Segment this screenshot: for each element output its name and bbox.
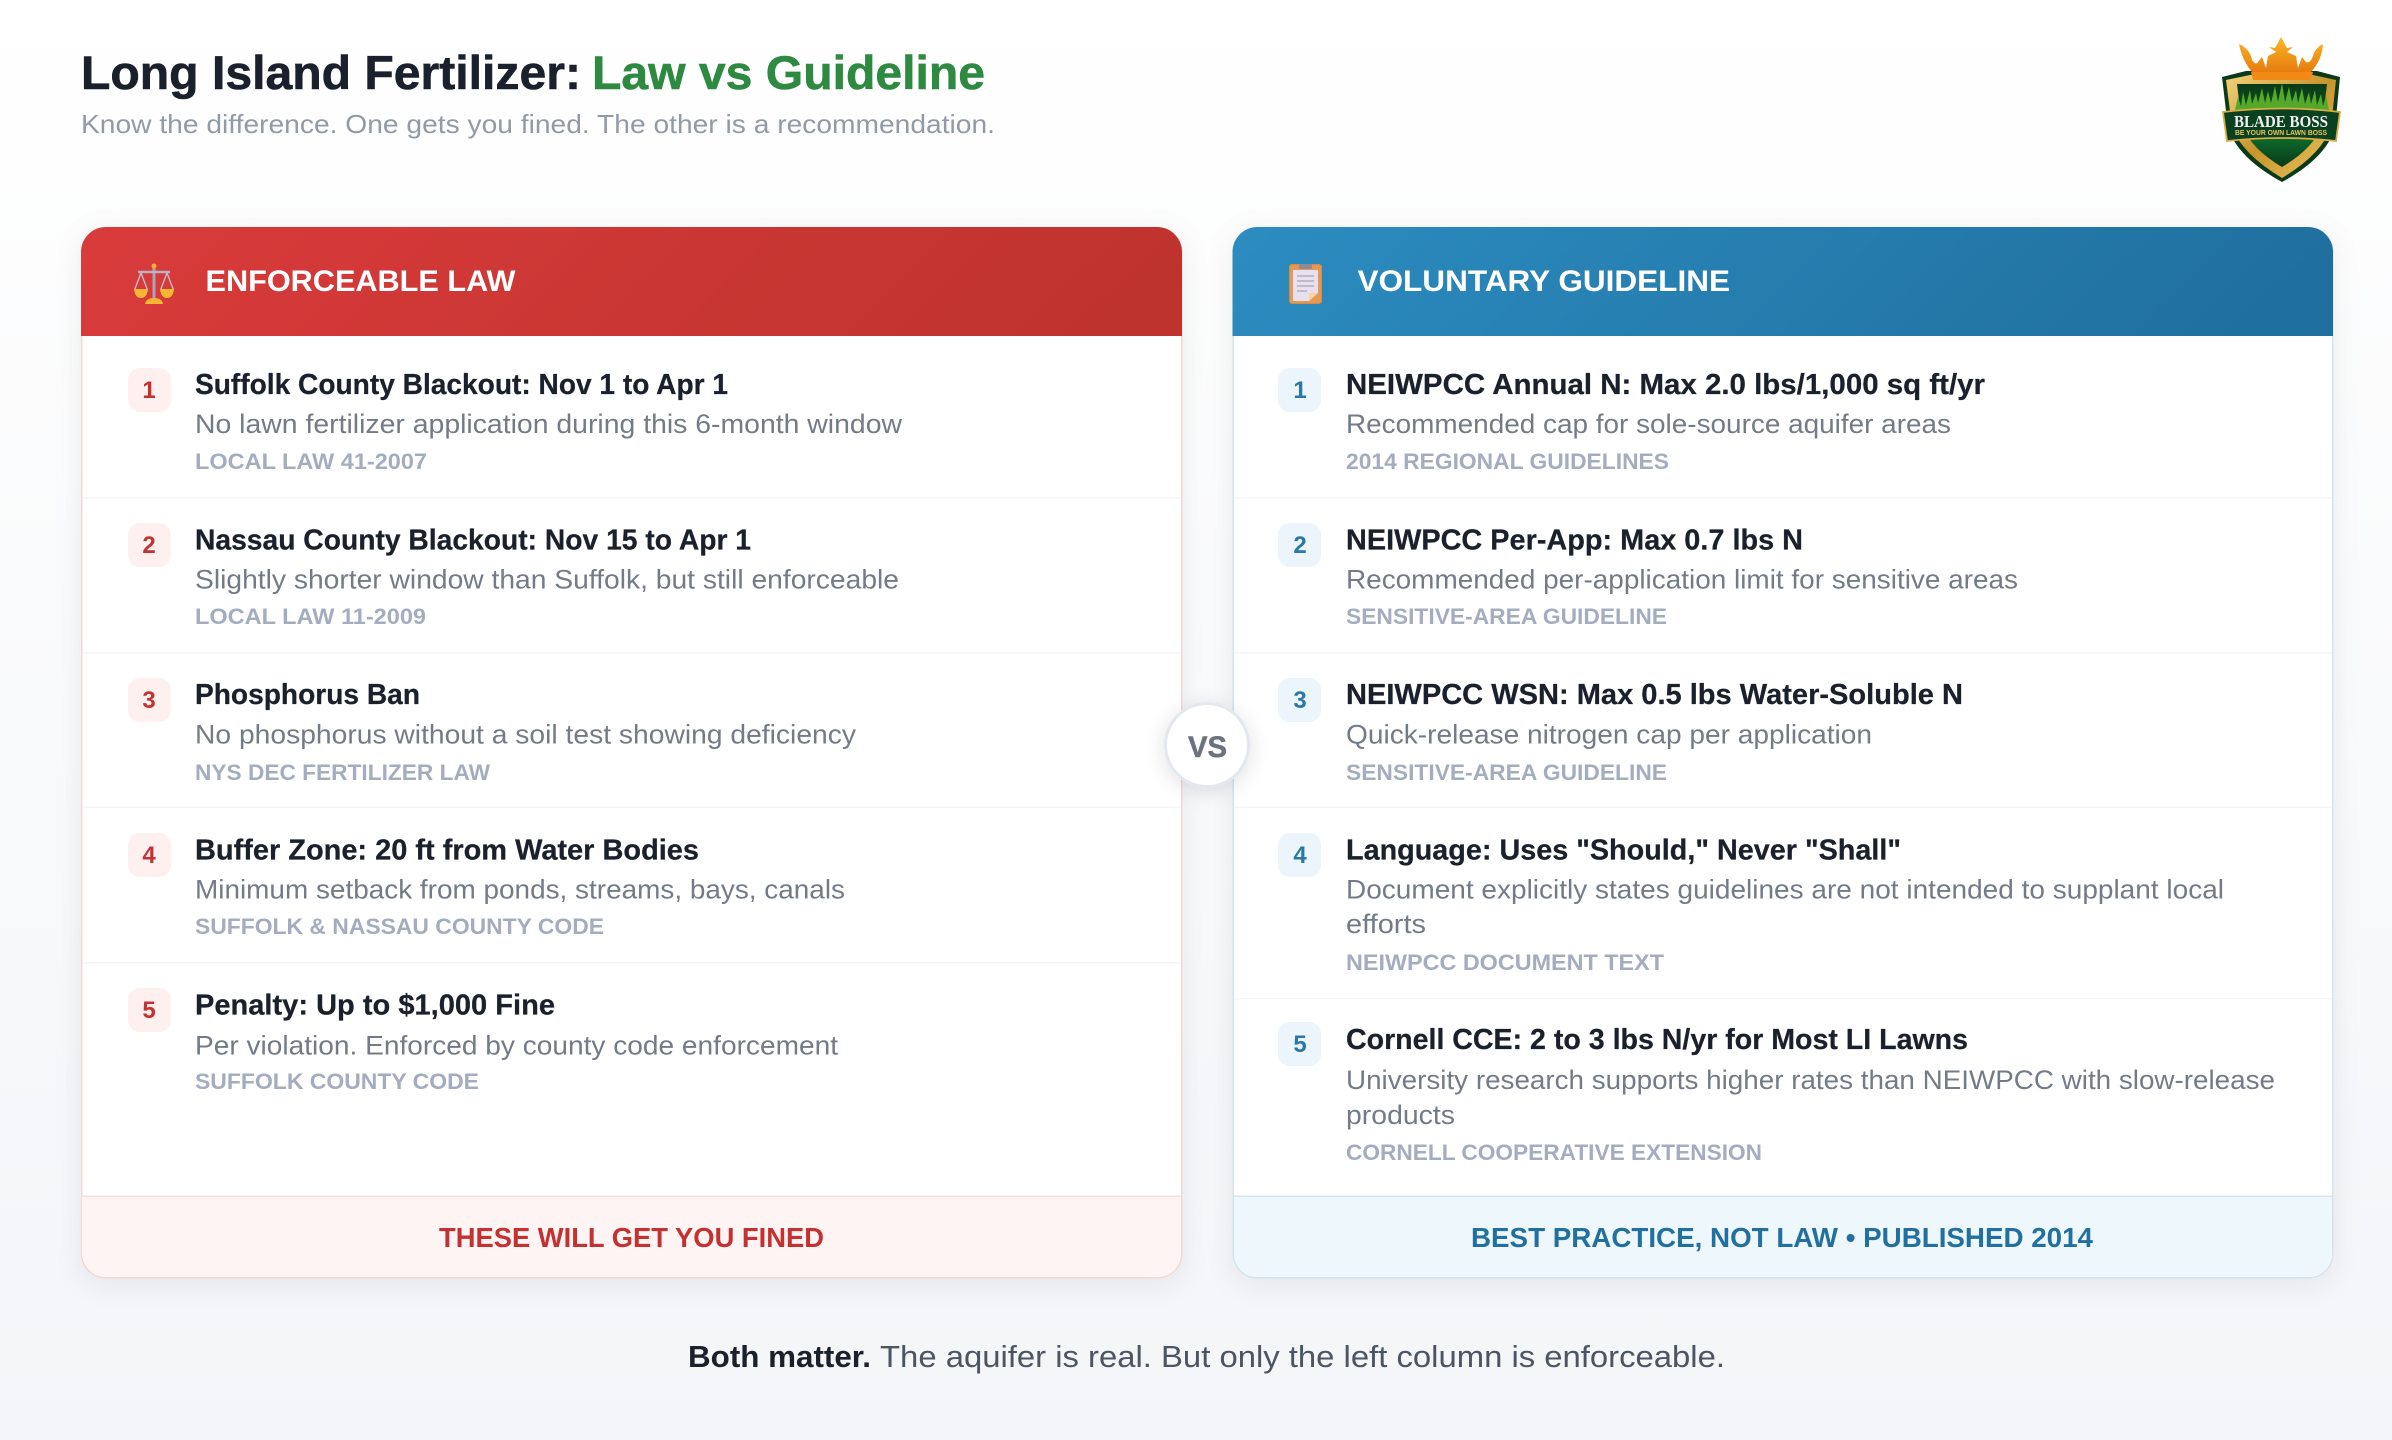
logo: Blade Boss shield: BE YOUR OWN LAWN BOSS: [2235, 130, 2327, 137]
panel heading: enforceable law: ENFORCEABLE LAW: [206, 265, 516, 298]
item 1: 2014 REGIONAL GUIDELINES: [1346, 449, 1669, 474]
item 4: NEIWPCC DOCUMENT TEXT: [1346, 950, 1665, 975]
item 3: 3: [142, 687, 156, 714]
item 2: Recommended per-application limit for sensitive areas: [1346, 564, 2018, 594]
item 5: [1278, 1022, 2275, 1165]
panel: voluntary guideline: [1232, 227, 2333, 1278]
subtitle: Know the difference. One gets you fined. The other is a recommendation.: [81, 109, 995, 139]
item 5: 5: [1293, 1031, 1307, 1058]
item 4: 4: [142, 842, 156, 869]
item 2: Nassau County Blackout: Nov 15 to Apr 1: [195, 524, 751, 556]
item 3: Phosphorus Ban: [195, 679, 420, 711]
panel footer: these will get you fined: THESE WILL GET YOU FINED: [439, 1222, 824, 1253]
item 3: NYS DEC FERTILIZER LAW: [195, 760, 490, 785]
logo: Blade Boss shield: [2222, 37, 2340, 182]
vs badge: VS: [1188, 731, 1227, 764]
item 4: [1278, 833, 2224, 975]
title: Law vs Guideline: [592, 46, 985, 99]
panel footer: these will get you fined: [82, 1196, 1181, 1277]
title: Long Island Fertilizer:: [81, 46, 581, 99]
item 4: Language: Uses "Should," Never "Shall": [1346, 834, 1901, 866]
item 3: No phosphorus without a soil test showing deficiency: [195, 720, 857, 750]
item 1: 1: [1293, 377, 1307, 404]
banner: [2223, 108, 2340, 141]
item 4: [128, 833, 845, 939]
item 3: Quick-release nitrogen cap per application: [1346, 720, 1872, 750]
item 3: NEIWPCC WSN: Max 0.5 lbs Water-Soluble N: [1346, 679, 1963, 711]
item 5: Penalty: Up to $1,000 Fine: [195, 990, 555, 1022]
panel: enforceable law: [81, 227, 1182, 1278]
item 5: [128, 988, 839, 1094]
item 1: NEIWPCC Annual N: Max 2.0 lbs/1,000 sq ft/yr: [1346, 369, 1985, 401]
item 2: [1278, 523, 2018, 629]
item 3: [128, 678, 857, 785]
panel header: voluntary guideline: [1232, 227, 2333, 336]
bottom takeaway: The aquifer is real. But only the left column is enforceable.: [880, 1340, 1725, 1374]
item 2: 2: [142, 532, 156, 559]
item 2: NEIWPCC Per-App: Max 0.7 lbs N: [1346, 524, 1803, 556]
bottom takeaway: Both matter.: [688, 1340, 871, 1374]
item 5: SUFFOLK COUNTY CODE: [195, 1069, 479, 1094]
panel footer: best practice, not law: [1234, 1196, 2332, 1277]
icon: clipboard: [1290, 264, 1322, 304]
item 4: SUFFOLK & NASSAU COUNTY CODE: [195, 914, 604, 939]
item 5: products: [1346, 1100, 1455, 1130]
item 2: LOCAL LAW 11-2009: [195, 604, 426, 629]
panel header: enforceable law: [81, 227, 1182, 336]
item 5: CORNELL COOPERATIVE EXTENSION: [1346, 1140, 1762, 1165]
item 1: LOCAL LAW 41-2007: [195, 449, 427, 474]
panel heading: voluntary guideline: VOLUNTARY GUIDELINE: [1358, 265, 1730, 298]
item 1: [1278, 368, 1985, 474]
grass: [2235, 83, 2329, 110]
item 1: Suffolk County Blackout: Nov 1 to Apr 1: [195, 369, 728, 401]
item 3: [1278, 678, 1963, 785]
item 5: Cornell CCE: 2 to 3 lbs N/yr for Most LI Lawns: [1346, 1024, 1968, 1056]
item 2: Slightly shorter window than Suffolk, but still enforceable: [195, 564, 899, 594]
item 4: Minimum setback from ponds, streams, bays, canals: [195, 874, 845, 904]
item 2: [128, 523, 899, 629]
item 3: SENSITIVE-AREA GUIDELINE: [1346, 760, 1667, 785]
vs badge: [1166, 704, 1248, 786]
item 4: Document explicitly states guidelines are not intended to supplant local: [1346, 874, 2224, 904]
item 1: No lawn fertilizer application during this 6-month window: [195, 409, 903, 439]
item 1: Recommended cap for sole-source aquifer areas: [1346, 409, 1951, 439]
item 4: efforts: [1346, 909, 1426, 939]
item 1: [128, 368, 903, 474]
item 2: SENSITIVE-AREA GUIDELINE: [1346, 604, 1667, 629]
item 3: 3: [1293, 687, 1307, 714]
item 4: 4: [1293, 842, 1307, 869]
item 2: 2: [1293, 532, 1307, 559]
item 5: Per violation. Enforced by county code enforcement: [195, 1030, 839, 1060]
item 1: 1: [142, 377, 156, 404]
logo: Blade Boss shield: BLADE BOSS: [2234, 112, 2328, 131]
item 4: Buffer Zone: 20 ft from Water Bodies: [195, 834, 699, 866]
icon: balance scale: [134, 264, 174, 304]
crown: [2239, 37, 2323, 80]
panel footer: best practice, not law: BEST PRACTICE, NOT LAW • PUBLISHED 2014: [1471, 1222, 2094, 1253]
item 5: University research supports higher rates than NEIWPCC with slow-release: [1346, 1065, 2275, 1095]
item 5: 5: [142, 997, 156, 1024]
